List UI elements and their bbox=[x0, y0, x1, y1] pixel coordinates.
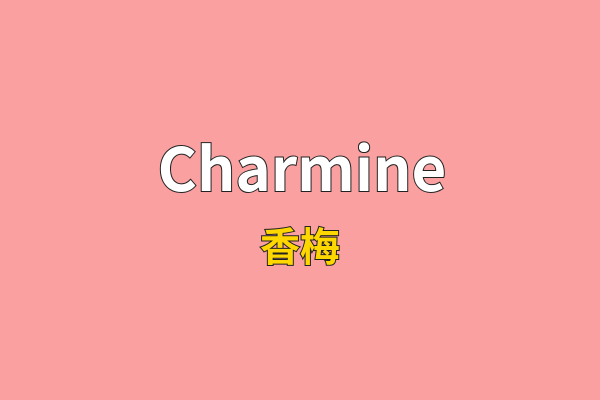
subtitle: 香梅: 香梅 bbox=[260, 215, 340, 273]
title: Charmine: Charmine bbox=[158, 122, 446, 209]
